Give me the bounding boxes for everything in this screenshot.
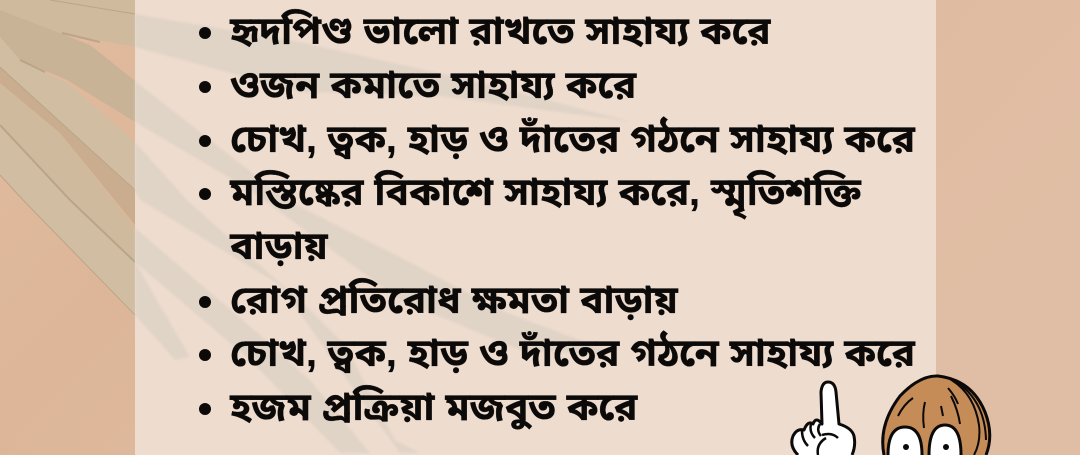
item 4: মস্তিষ্কের বিকাশে সাহায্য করে, স্মৃতিশক্তি (230, 171, 861, 214)
item 7: হজম প্রক্রিয়া মজবুত করে (230, 386, 637, 429)
item 3: চোখ, ত্বক, হাড় ও দাঁতের গঠনে সাহায্য করে (230, 118, 915, 161)
item 2: ওজন কমাতে সাহায্য করে (230, 64, 636, 107)
translucent text panel (135, 0, 936, 455)
item 4: বাড়ায় (230, 225, 328, 268)
item 6: চোখ, ত্বক, হাড় ও দাঁতের গঠনে সাহায্য করে (230, 332, 915, 375)
item 4 (229, 170, 862, 268)
icon: coconut character (881, 374, 992, 455)
item 1: হৃদপিণ্ড ভালো রাখতে সাহায্য করে (230, 10, 771, 53)
fronds seen through panel (135, 14, 632, 453)
fronds left of panel (0, 0, 135, 315)
eyes (888, 425, 961, 455)
icon: pointing hand (790, 380, 856, 455)
item 5: রোগ প্রতিরোধ ক্ষমতা বাড়ায় (230, 279, 678, 322)
